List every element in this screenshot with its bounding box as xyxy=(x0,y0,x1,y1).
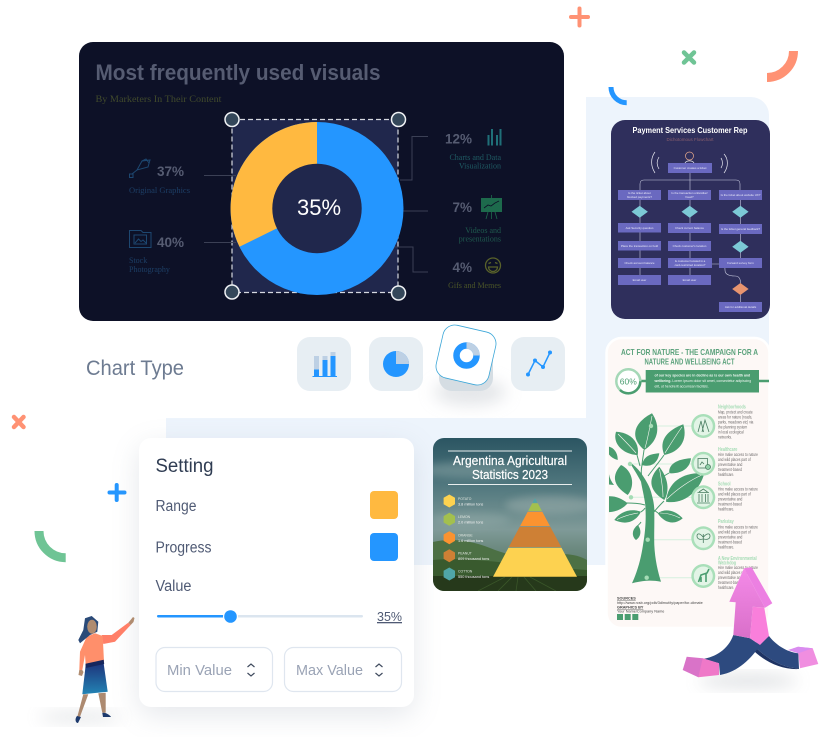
poster item text: Parkstay xyxy=(718,518,734,524)
decoration: blue plus xyxy=(110,485,124,500)
stat: original graphics: 37% xyxy=(157,164,184,179)
flowchart box labels: Email user xyxy=(683,278,696,282)
poster item text: and wild places part of xyxy=(718,491,751,497)
poster item text: preventative and xyxy=(718,534,742,540)
arrow stem side xyxy=(750,607,769,645)
min value field: Min Value xyxy=(167,662,232,679)
poster item text: Hire make access to nature xyxy=(718,524,759,530)
stat: stock photography: 40% xyxy=(157,235,184,250)
poster item text: and wild places part of xyxy=(718,529,751,535)
flowchart box labels: Is the transaction unfamiliar/ xyxy=(671,191,708,195)
arrow right foot xyxy=(788,647,818,668)
poster item text: A New Environmental xyxy=(718,555,757,561)
max value field: Max Value xyxy=(296,662,363,679)
poster item text: preventative and xyxy=(718,574,742,580)
poster item text: treatment-based xyxy=(718,579,742,585)
hexagon legend: COTTON xyxy=(458,570,473,574)
poster heading xyxy=(448,451,572,484)
flowchart box labels: Customer creates a ticket xyxy=(674,166,707,170)
decoration: orange plus xyxy=(571,8,588,26)
flowchart subtitle: Dichotomous Flowchart xyxy=(666,137,714,142)
progress row xyxy=(156,533,398,561)
panel: nature campaign poster xyxy=(604,338,770,628)
range row: Range xyxy=(156,498,196,515)
selection box xyxy=(232,120,398,292)
flowchart box labels: Forward survey form xyxy=(727,261,754,265)
donut chart xyxy=(230,122,404,295)
poster title: ACT FOR NATURE - THE CAMPAIGN FOR A xyxy=(621,347,758,357)
social icons xyxy=(617,614,638,620)
icon: laughing face xyxy=(486,258,500,273)
poster item text: School xyxy=(718,481,731,487)
item glyphs xyxy=(697,420,710,582)
min value field xyxy=(156,648,272,692)
icon tile: line chart xyxy=(511,337,565,391)
hexagon legend: 3.8 million tons xyxy=(458,502,483,506)
arrow left arm xyxy=(703,635,760,675)
connector bars xyxy=(640,380,769,382)
60 percent ring xyxy=(616,369,640,393)
pyramid chart xyxy=(493,498,577,577)
flowchart boxes xyxy=(618,163,762,312)
poster item text: the planning system xyxy=(718,424,748,430)
decoration: green cross xyxy=(684,52,694,62)
flowchart box labels: Is the ticket about xyxy=(628,191,651,195)
poster item text: treatment-based xyxy=(718,539,742,545)
title: Most frequently used visuals xyxy=(96,60,380,85)
decoration: blue arc xyxy=(611,87,627,103)
decoration: coral arc xyxy=(767,51,794,78)
flowchart decision diamonds xyxy=(632,206,749,295)
poster item text: healthcare. xyxy=(718,506,734,512)
icon tile: bar chart xyxy=(297,337,351,391)
panel: flowchart card xyxy=(611,120,770,319)
poster item text: networks. xyxy=(718,434,732,440)
poster item text: healthcare. xyxy=(718,544,734,550)
poster item text: Hire make access to nature xyxy=(718,486,759,492)
icon: pen tool xyxy=(130,159,150,178)
range row xyxy=(156,491,398,519)
slider value: 35% xyxy=(377,609,402,624)
hexagon legend: ORANGE xyxy=(458,534,473,538)
hexagon legend: 1.6 million tons xyxy=(458,539,483,543)
stat: videos: presentations xyxy=(459,234,501,244)
icon: presentation board xyxy=(481,195,502,219)
leader lines xyxy=(204,136,428,272)
donut chart: 35% xyxy=(297,195,341,220)
poster item text: parks, meadows etc) via xyxy=(718,419,754,425)
poster intro box: elit, ut hendrerit accumsan facilisis. xyxy=(654,384,709,388)
poster intro box: wellbeing. Lorem ipsum dolor sit amet, consectetur adipiscing xyxy=(654,379,751,383)
poster title: NATURE AND WELLBEING ACT xyxy=(644,356,734,366)
leaf veins xyxy=(617,416,702,520)
flowchart box labels: Check current balance xyxy=(675,226,704,230)
chart type label: Chart Type xyxy=(86,357,184,380)
hexagon legend: POTATO xyxy=(458,497,472,501)
illustration: pink 3D arrow xyxy=(683,567,818,677)
icon: agent with sound waves xyxy=(652,152,727,173)
stat: original graphics: Original Graphics xyxy=(129,186,190,195)
flowchart box labels: fraud? xyxy=(685,195,694,199)
60 percent ring: 60% xyxy=(620,376,637,386)
stat: gifs and memes: 4% xyxy=(452,260,472,275)
poster item text xyxy=(718,404,759,590)
panel: dark donut chart card xyxy=(79,42,564,321)
poster intro box xyxy=(646,370,759,392)
flowchart connectors xyxy=(640,173,740,302)
tree connector lines xyxy=(630,426,692,578)
panel: setting card xyxy=(139,438,414,715)
flowchart title: Payment Services Customer Rep xyxy=(632,126,748,135)
flowchart box labels: Is customer located in a xyxy=(675,259,706,263)
tree illustration xyxy=(604,413,704,583)
decoration: green arc xyxy=(39,531,66,558)
poster item text: preventative and xyxy=(718,496,742,502)
icon tile: pie chart xyxy=(369,337,423,391)
hexagon legend xyxy=(444,494,489,580)
arrow front xyxy=(729,568,765,638)
flowchart box labels: Place the transaction on hold xyxy=(621,244,659,248)
tree leaves xyxy=(604,413,704,540)
stat: stock photography: Photography xyxy=(129,265,170,274)
poster heading: Statistics 2023 xyxy=(472,468,548,482)
stat: charts and data: Charts and Data xyxy=(449,153,501,162)
flowchart box labels: Check customer's location xyxy=(673,244,707,248)
background panel xyxy=(166,97,769,565)
poster item text: Healthcare xyxy=(718,446,738,452)
flowchart box labels xyxy=(621,166,761,309)
hexagon legend: 550 thousand tons xyxy=(458,575,489,579)
poster item text: preventative and xyxy=(718,461,742,467)
arrow right arm xyxy=(753,636,799,668)
decoration: coral cross xyxy=(14,417,24,427)
poster item text: healthcare. xyxy=(718,584,734,590)
tree anchor dots xyxy=(628,424,653,580)
poster sources: SOURCES xyxy=(617,596,636,600)
poster title xyxy=(621,347,758,366)
tree trunk and branches xyxy=(627,450,669,583)
arrow head side xyxy=(744,567,772,608)
poster item text: healthcare. xyxy=(718,471,734,477)
icon: bars xyxy=(488,129,502,146)
poster item text: treatment-based xyxy=(718,466,742,472)
hexagon legend: PEANUT xyxy=(458,552,472,556)
poster item text: treatment-based xyxy=(718,501,742,507)
illustration: woman pointing xyxy=(76,616,134,723)
selection handles xyxy=(225,112,406,300)
arrow shadow xyxy=(698,675,798,687)
poster intro box: of our key species are in decline as is our own health and xyxy=(654,374,750,378)
progress row: Progress xyxy=(156,540,212,556)
flowchart box labels: Ask for additional details xyxy=(725,305,757,309)
stat: gifs and memes: Gifs and Memes xyxy=(448,281,501,290)
poster item text: Watchdog xyxy=(718,560,736,566)
hexagon legend: 2.0 million tons xyxy=(458,520,483,524)
panel: Argentina agricultural statistics xyxy=(433,438,587,591)
poster item text: Hire make access to nature xyxy=(718,451,759,457)
value label: Value xyxy=(156,578,192,595)
subtitle: By Marketers In Their Content xyxy=(96,95,222,105)
poster item text: and wild places part of xyxy=(718,569,751,575)
chart type backing card xyxy=(0,0,586,418)
poster item text: in local ecological xyxy=(718,429,744,435)
hexagon legend: LEMON xyxy=(458,515,471,519)
icon: folder image xyxy=(130,230,151,248)
hexagon legend: 809 thousand tons xyxy=(458,557,489,561)
max value field xyxy=(284,648,402,692)
stat: charts and data: 12% xyxy=(445,132,472,146)
setting heading: Setting xyxy=(156,456,214,477)
value slider xyxy=(157,609,363,624)
icon tile: donut selected xyxy=(434,323,506,405)
stat: gifs and memes xyxy=(448,260,501,290)
stat: videos: Videos and xyxy=(465,226,501,235)
figure shadow xyxy=(38,712,122,722)
poster item text: Neighborhoods xyxy=(718,404,746,410)
stat: stock photography xyxy=(129,235,184,274)
stat: charts and data xyxy=(445,132,501,170)
landscape photo xyxy=(420,462,595,591)
flowchart box labels: Is the ticket general feedback? xyxy=(721,227,760,231)
flowchart box labels: card-restricted location? xyxy=(675,263,706,267)
poster item text: Map, protect and create xyxy=(718,409,753,415)
stat: videos: 7% xyxy=(452,200,472,215)
stat: original graphics xyxy=(129,164,190,195)
item circles xyxy=(691,414,715,588)
arrow left foot xyxy=(683,657,719,677)
flowchart box labels: Is the ticket about website UX? xyxy=(721,193,761,197)
poster sources: Your Name/Company Name xyxy=(617,610,664,614)
poster item text: areas for nature (roads, xyxy=(718,414,752,420)
poster item text: Hire make access to nature xyxy=(718,564,759,570)
stat: charts and data: Visualization xyxy=(459,162,501,170)
poster item text: and wild places part of xyxy=(718,456,751,462)
flowchart box labels: Ask Security question xyxy=(626,226,654,230)
stat: stock photography: Stock xyxy=(129,256,147,265)
flowchart box labels: Check account balance xyxy=(624,261,655,265)
poster sources: GRAPHICS BY xyxy=(617,606,644,610)
poster heading: Argentina Agricultural xyxy=(453,454,567,468)
poster sources: http://www.rcsb.org/pdb/3dlmut/ty/paper/for-climate xyxy=(617,601,703,605)
flowchart box labels: blocked payments? xyxy=(627,195,652,199)
stat: videos xyxy=(452,200,501,244)
poster sources xyxy=(617,596,703,614)
flowchart box labels: Email user xyxy=(633,278,646,282)
